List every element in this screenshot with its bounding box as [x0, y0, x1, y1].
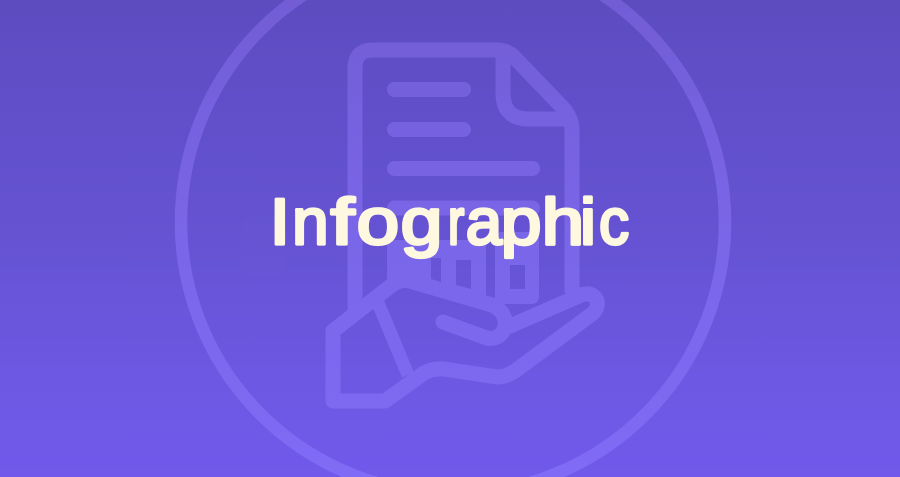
title: n	[292, 185, 328, 258]
title: c	[599, 186, 629, 259]
document outline	[355, 50, 572, 318]
title: I	[270, 185, 290, 258]
text lines	[394, 90, 532, 208]
bar chart	[387, 232, 539, 304]
title: g	[401, 186, 442, 258]
title: a	[466, 185, 503, 258]
faint blurred shape	[241, 215, 285, 277]
title	[270, 185, 629, 259]
hand	[333, 280, 597, 401]
title: h	[542, 185, 584, 258]
icon: circle outline	[181, 0, 725, 477]
title: p	[501, 186, 541, 258]
title: r	[448, 186, 464, 259]
title: i	[580, 186, 596, 258]
title: f	[331, 185, 355, 258]
document fold	[503, 52, 570, 119]
title: o	[357, 185, 399, 258]
icon: document with hand	[333, 50, 597, 401]
